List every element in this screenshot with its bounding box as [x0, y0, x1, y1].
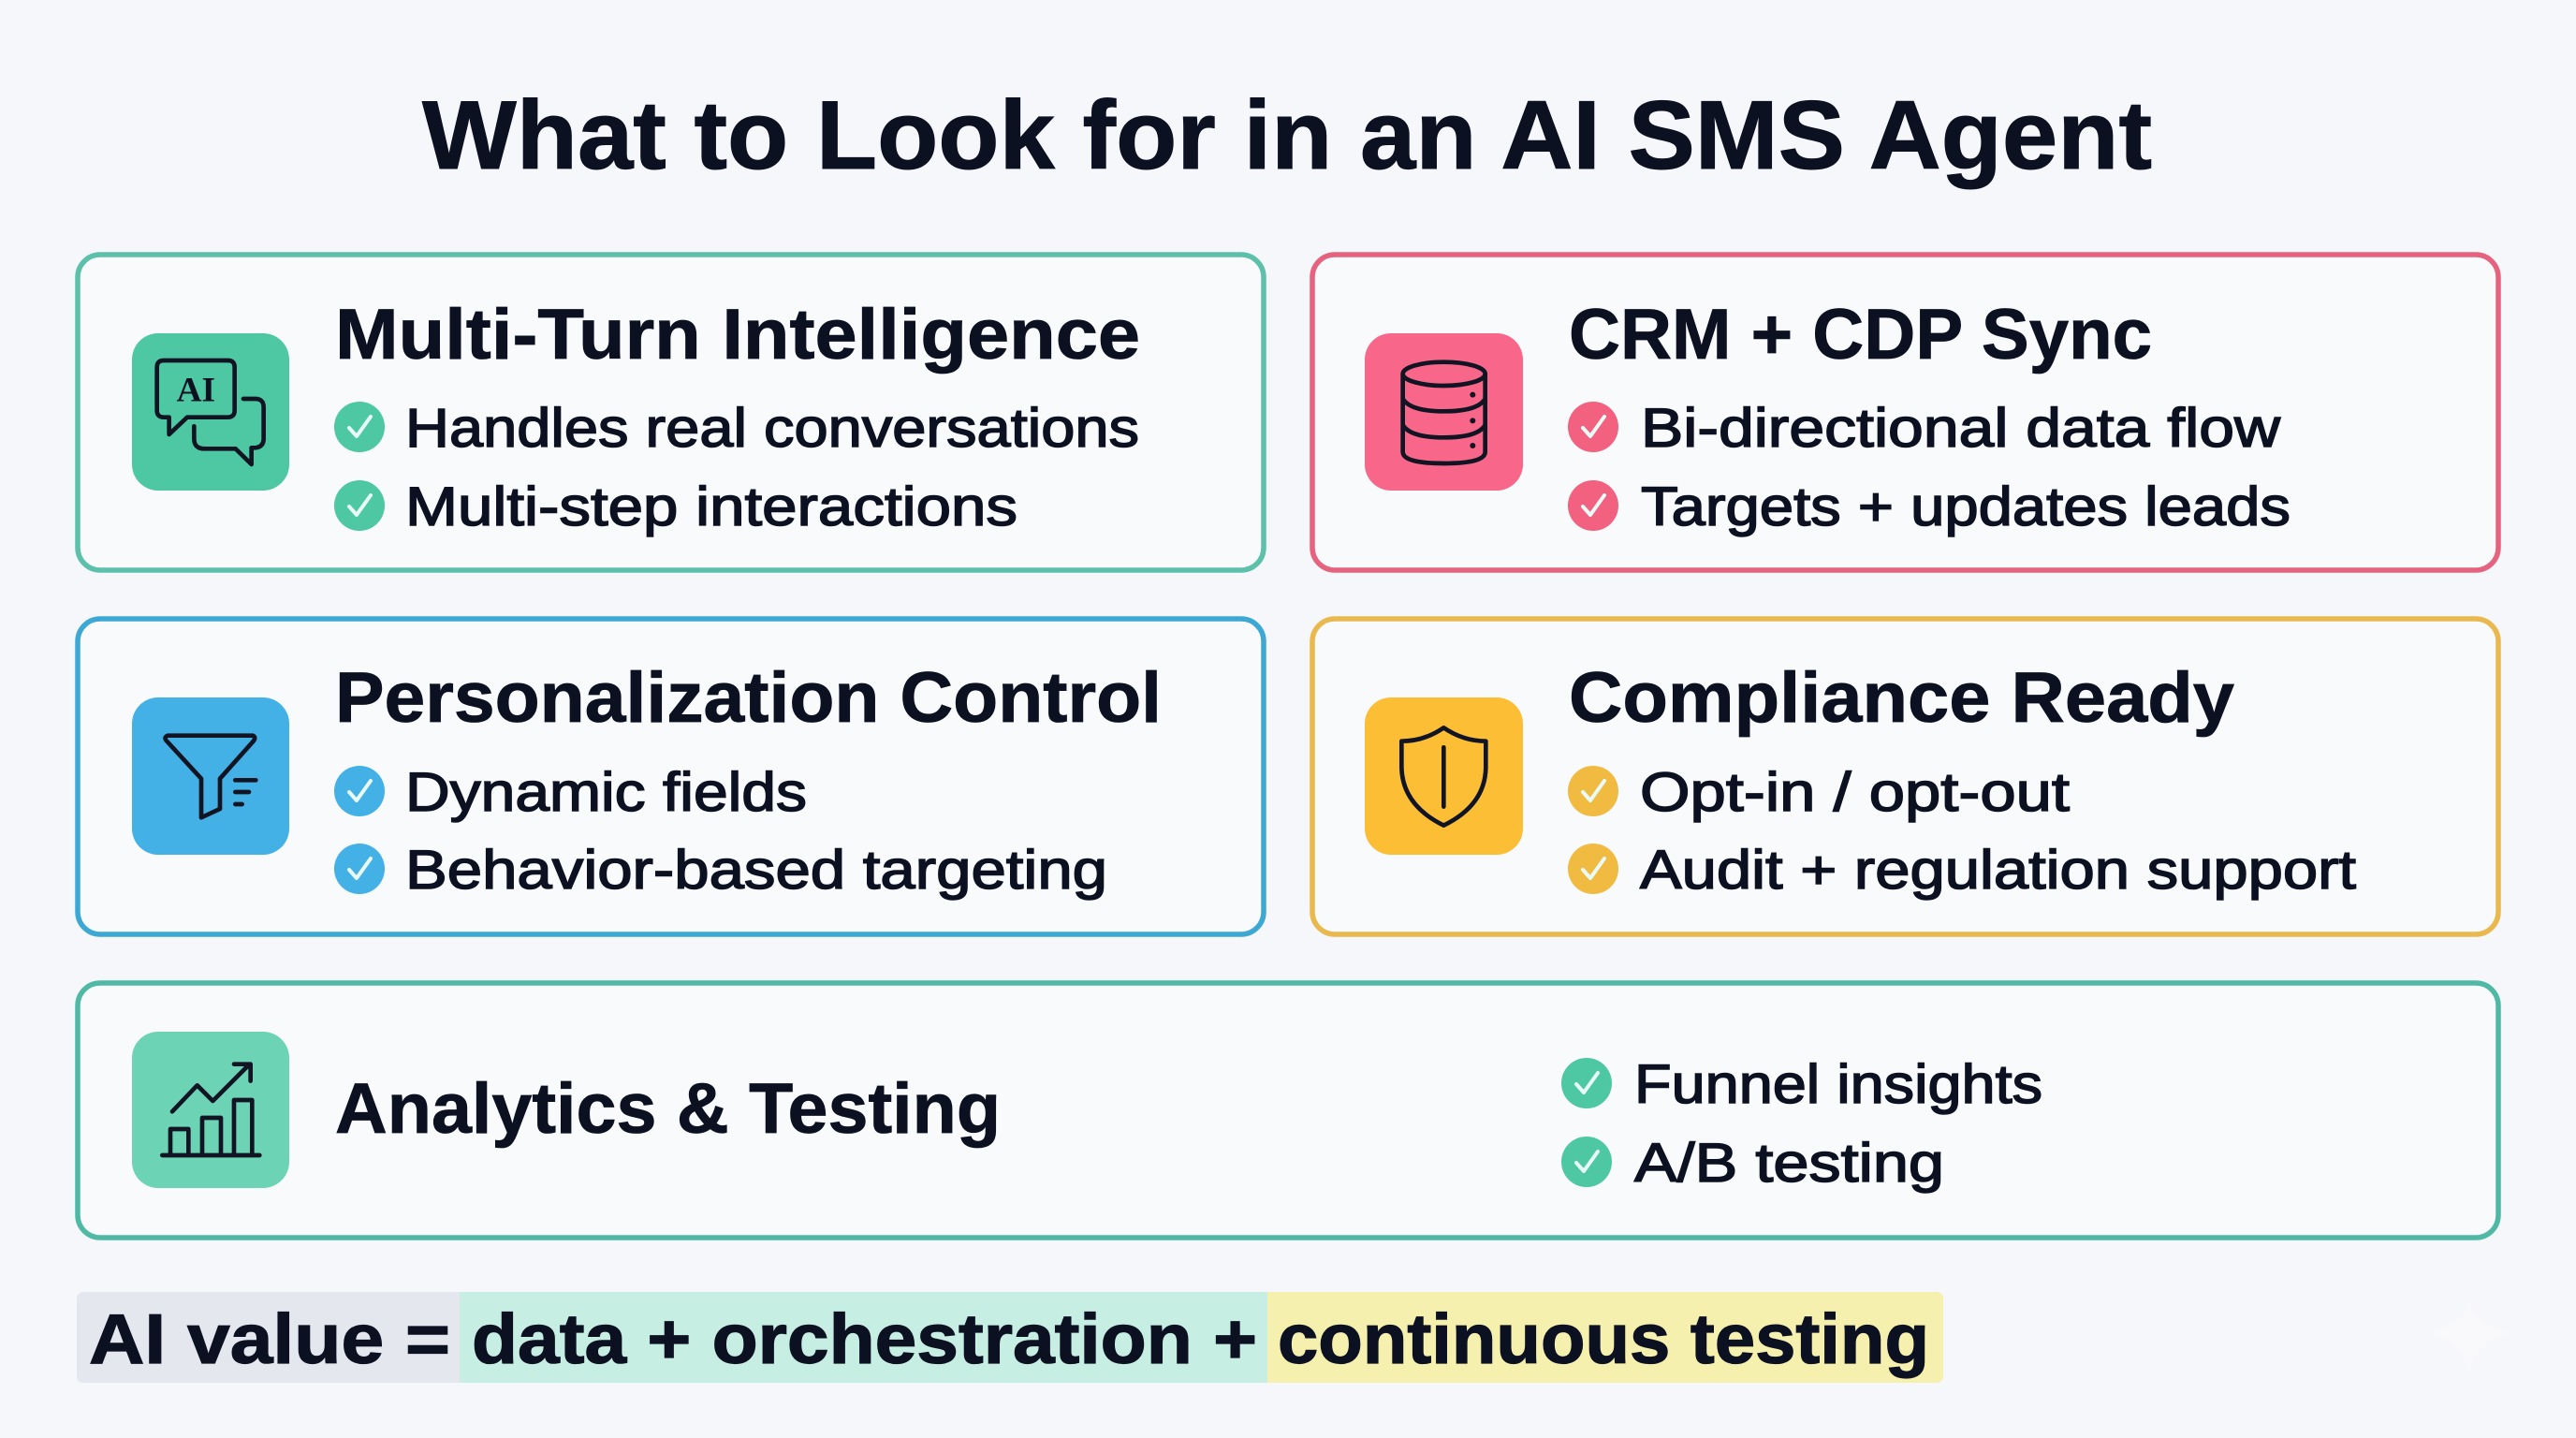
heading: CRM + CDP Sync [1569, 295, 2152, 374]
icon: faint sparkle watermark [2428, 1301, 2510, 1372]
callout: AI value formula: continuous testing [1278, 1299, 1929, 1378]
icon: database [1365, 333, 1523, 491]
bullet: Multi-step interactions: Multi-step interactions [405, 477, 1017, 537]
bullet: Audit + regulation support: Audit + regulation support [1640, 840, 2356, 901]
bullet: Opt-in / opt-out: Opt-in / opt-out [1640, 762, 2070, 823]
callout: AI value formula: data + orchestration + [472, 1299, 1257, 1378]
bullet: A/B testing: A/B testing [1634, 1133, 1944, 1194]
title: What to Look for in an AI SMS Agent [422, 81, 2152, 190]
heading: Personalization Control [335, 658, 1162, 738]
icon: AI chat bubbles: AI [177, 372, 215, 410]
heading: Compliance Ready [1569, 658, 2234, 738]
icon: AI chat bubbles [132, 333, 289, 491]
bullet: Funnel insights: Funnel insights [1634, 1054, 2042, 1115]
icon: growth chart [132, 1032, 289, 1188]
bullet: A/B testing [1561, 1133, 1944, 1194]
icon: funnel [132, 697, 289, 855]
panel: Analytics & Testing [78, 983, 2498, 1238]
icon: shield [1365, 697, 1523, 855]
heading: Multi-Turn Intelligence [335, 295, 1140, 374]
panel: Compliance Ready [1312, 619, 2498, 934]
callout: AI value formula: AI value = [89, 1299, 450, 1378]
panel: Multi-Turn Intelligence [78, 255, 1264, 570]
heading: Analytics & Testing [335, 1069, 1001, 1149]
panel: Personalization Control [78, 619, 1264, 934]
bullet: Dynamic fields: Dynamic fields [405, 762, 807, 823]
bullet: Behavior-based targeting: Behavior-based targeting [405, 840, 1107, 901]
bullet: Handles real conversations: Handles real conversations [405, 398, 1139, 459]
bullet: Targets + updates leads: Targets + updates leads [1641, 477, 2291, 537]
panel: CRM + CDP Sync [1312, 255, 2498, 570]
bullet: Bi-directional data flow: Bi-directional data flow [1641, 398, 2281, 459]
callout: AI value formula [77, 1292, 1943, 1383]
